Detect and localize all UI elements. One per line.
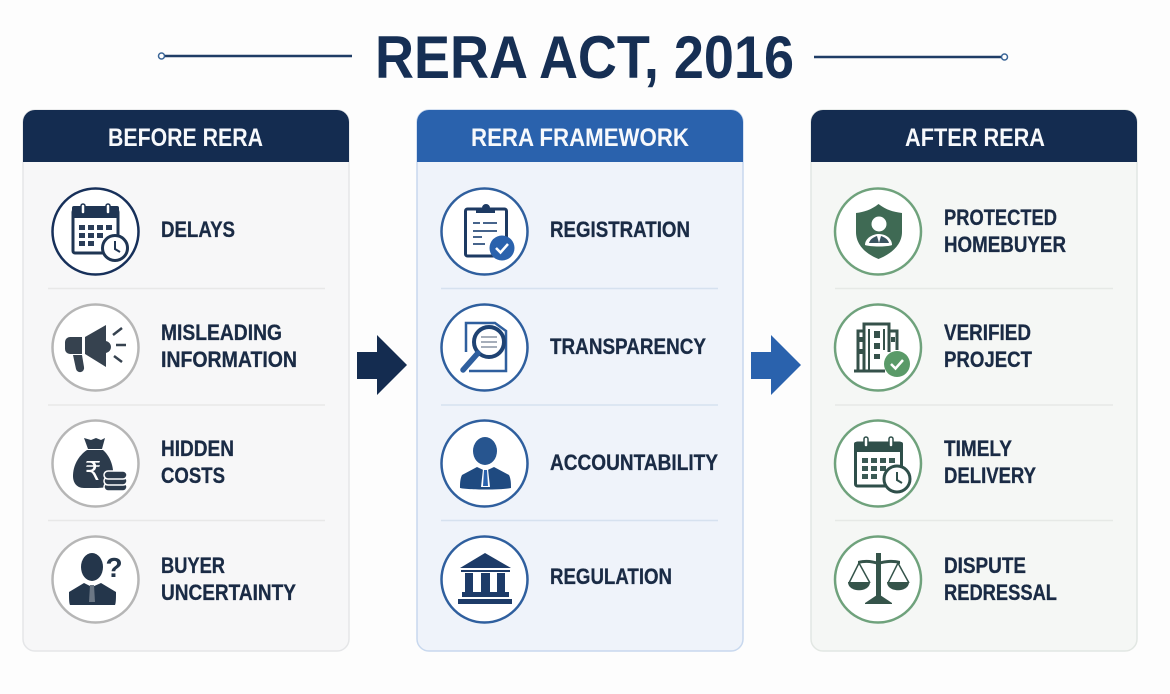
icon: money bag with coins [73,438,127,491]
item: buyer uncertainty: BUYER [161,553,225,578]
icon: government building [458,553,512,604]
item: timely delivery [835,420,1036,506]
header: rera framework [417,110,743,162]
item: misleading information: INFORMATION [161,347,297,372]
item: accountability [442,420,718,506]
icon: calendar with clock [854,437,910,492]
panel: rera framework [417,110,743,651]
item: misleading information: MISLEADING [161,320,282,345]
icon: megaphone [65,325,126,372]
item: transparency [442,304,706,390]
item: protected homebuyer: PROTECTED [944,205,1057,230]
panel: after rera [811,110,1137,651]
header: before rera: BEFORE RERA [108,124,263,152]
icon: document with magnifier [463,323,506,371]
item: hidden costs: HIDDEN [161,436,234,461]
arrow: framework to after [751,335,801,395]
item: hidden costs [52,420,234,506]
icon: person with question mark: ? [105,552,123,583]
arrow: before to framework [357,335,407,395]
header: after rera [811,110,1137,162]
header: rera framework: RERA FRAMEWORK [471,124,689,152]
icon: clipboard with check [466,204,514,260]
item: timely delivery: TIMELY [944,436,1012,461]
item: buyer uncertainty [52,536,296,622]
item: protected homebuyer [835,188,1066,274]
item: verified project [835,304,1032,390]
item: registration [442,188,690,274]
title [158,24,1008,91]
item: dispute redressal: REDRESSAL [944,580,1057,605]
item: delays: DELAYS [161,217,235,242]
header: before rera [23,110,349,162]
item: regulation: REGULATION [550,564,672,589]
item: timely delivery: DELIVERY [944,463,1036,488]
icon: person with question mark [69,552,123,605]
item: dispute redressal: DISPUTE [944,553,1026,578]
item: transparency: TRANSPARENCY [550,334,706,359]
item: buyer uncertainty: UNCERTAINTY [161,580,296,605]
item: accountability: ACCOUNTABILITY [550,450,718,475]
item: verified project: VERIFIED [944,320,1031,345]
item: verified project: PROJECT [944,347,1032,372]
item: regulation [442,536,672,622]
title: RERA ACT, 2016 [375,24,794,91]
icon: building with check [854,324,910,377]
icon: calendar with clock [72,204,128,260]
header: after rera: AFTER RERA [905,124,1045,152]
item: delays [52,188,235,274]
item: dispute redressal [835,536,1057,622]
item: registration: REGISTRATION [550,217,690,242]
item: protected homebuyer: HOMEBUYER [944,232,1066,257]
item: hidden costs: COSTS [161,463,225,488]
icon: balance scales [848,553,909,604]
icon: shield with person [856,204,902,259]
icon: business person [460,437,511,490]
item: misleading information [52,304,297,390]
panel: before rera [23,110,349,651]
icon: money bag with coins: ₹ [85,457,101,487]
